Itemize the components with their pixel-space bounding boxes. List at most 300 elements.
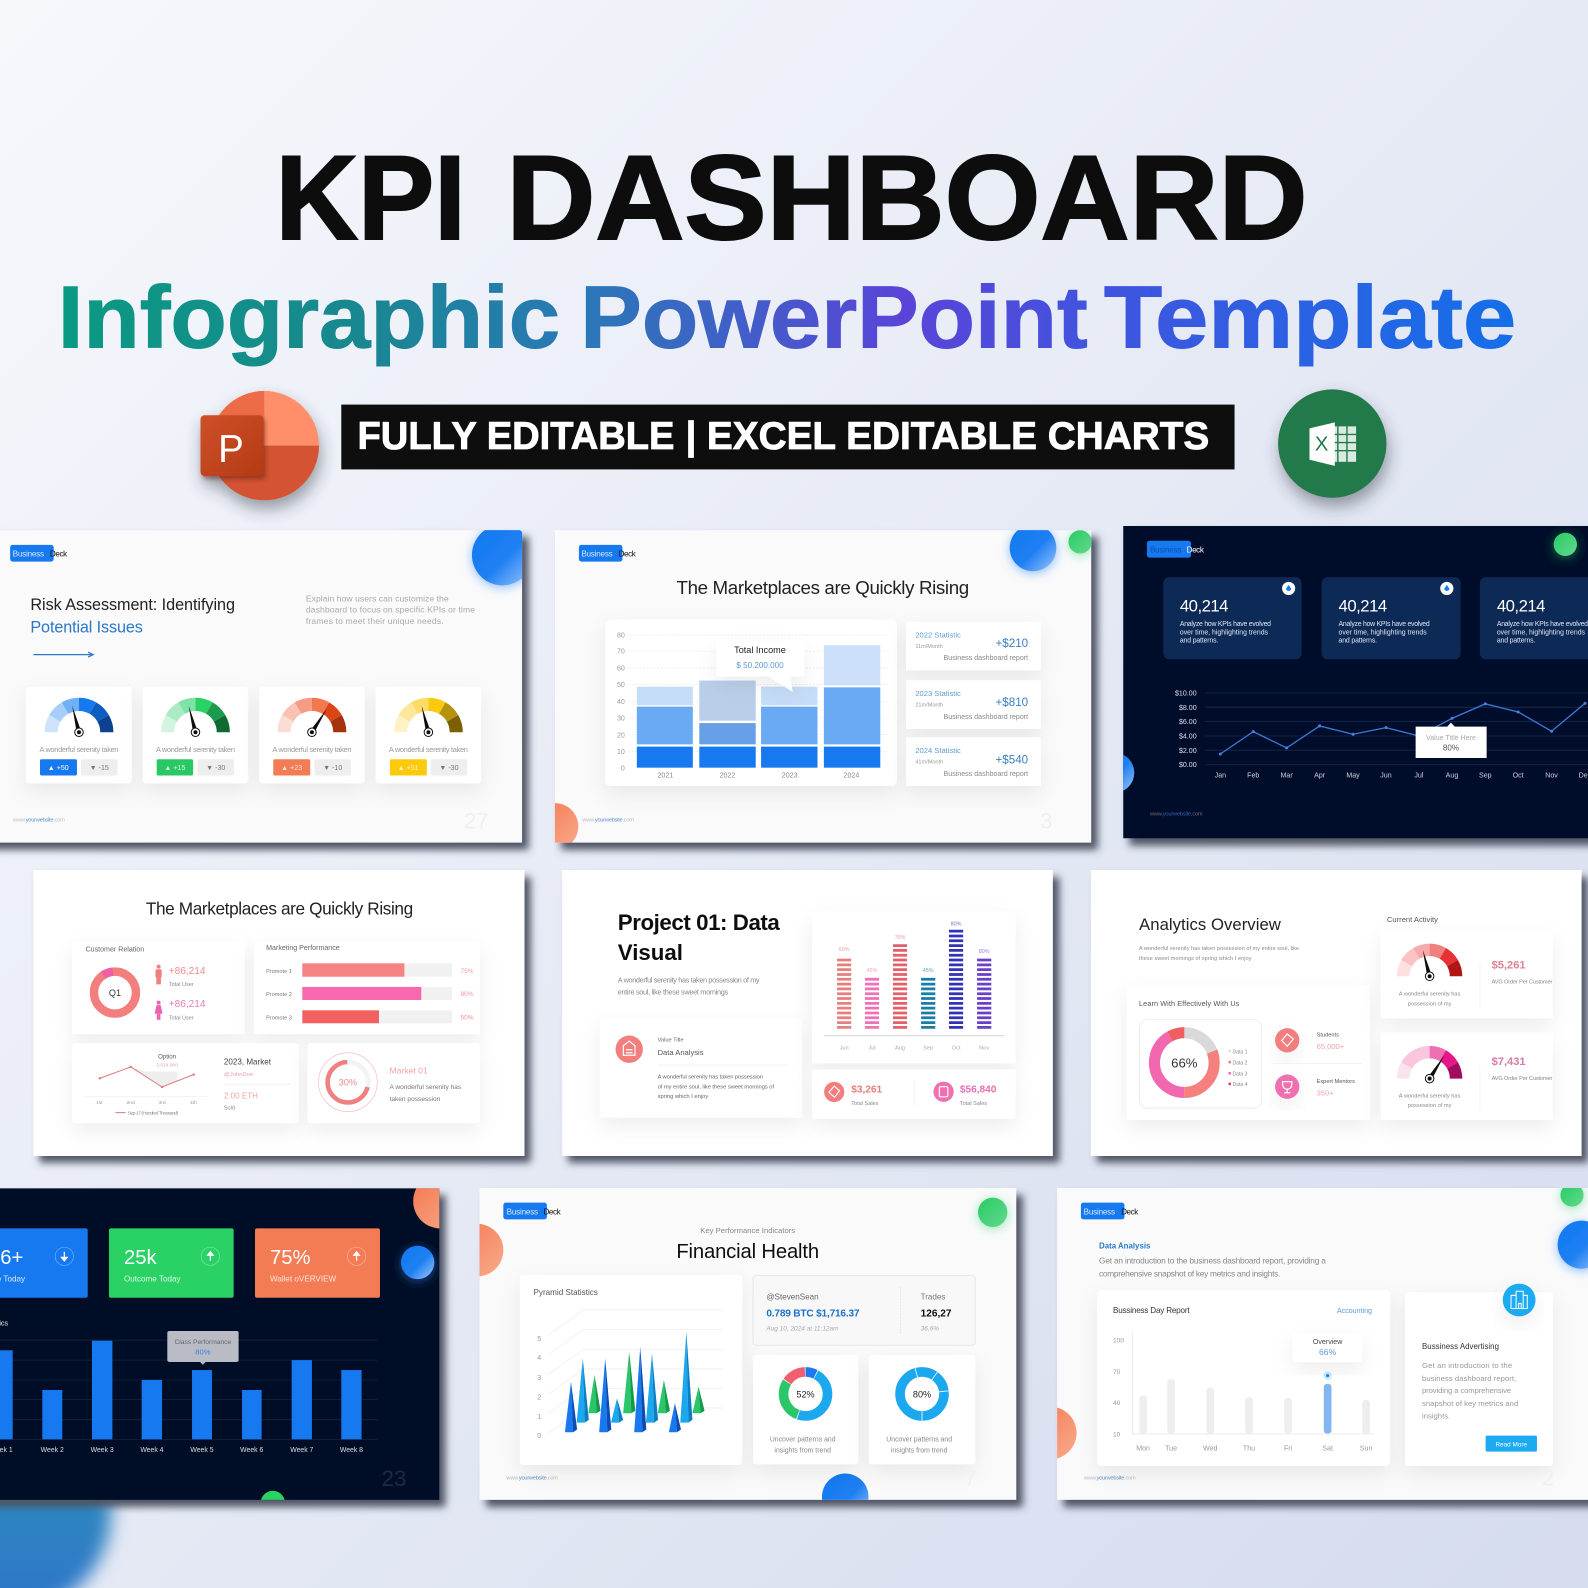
card: marketing performance: 75% (460, 968, 474, 975)
card: line chart (72, 1043, 299, 1123)
card: yellow gauge (376, 687, 481, 783)
card: outcome today: 25k (124, 1247, 157, 1269)
chart: line chart: Sep (1479, 771, 1492, 779)
footer url: www.yourwebsite.com (1083, 1476, 1136, 1482)
heading: Risk Assessment: Identifying (30, 596, 235, 614)
card: trade summary: @StevenSean (766, 1292, 819, 1301)
stat card 2024: 2024 Statistic (915, 746, 961, 755)
heading: Project 01: Data (618, 910, 780, 935)
chart: line chart: Jun (1380, 771, 1392, 779)
chart: striped bars: Oct (952, 1046, 961, 1052)
tooltip: value title: Value Title Here (1426, 734, 1476, 742)
card: business advertising: Get an introduction to the (1422, 1361, 1512, 1370)
card: pyramid statistics: 0 (537, 1432, 541, 1440)
card: data analysis (600, 1018, 802, 1118)
card: donut 52% (753, 1355, 858, 1464)
card: data analysis: A wonderful serenity has taken possession (658, 1074, 763, 1080)
card: line chart: Sep-17 (Hundred Thousand) (128, 1111, 179, 1117)
description: comprehensive snapshot of key metrics and insights. (1099, 1268, 1280, 1278)
card: gauge red (1381, 932, 1553, 1018)
chart: weekly bars: Week 4 (140, 1447, 164, 1454)
chart: stacked bars: 2022 (720, 771, 735, 779)
icon: Excel logo: X (1315, 434, 1329, 456)
card: market ring: A wonderful serenity has (390, 1084, 462, 1091)
card: business day report: 100 (1113, 1337, 1124, 1344)
card: donut 80%: 80% (913, 1390, 931, 1400)
card: green gauge: ▼ -30 (206, 764, 225, 772)
stat card 2022 (906, 622, 1041, 670)
stat card 2023: 2023 Statistic (915, 689, 961, 698)
chart: weekly bars (0, 1340, 377, 1454)
KPI card 2: Analyze how KPIs have evolved (1339, 621, 1430, 628)
logo: Deck (619, 550, 637, 559)
KPI card 1 (1163, 577, 1302, 659)
subtitle: Infographic PowerPoint Template: Template (1104, 267, 1516, 366)
chart: striped bars: Aug (895, 1046, 905, 1052)
heading (30, 596, 235, 637)
logo (1147, 541, 1205, 558)
card: business day report: Tue (1165, 1445, 1177, 1453)
card: gauge red: possession of my (1408, 1001, 1452, 1007)
chart: stacked bars: 2021 (658, 771, 673, 779)
tooltip: class performance: Class Performance (174, 1339, 232, 1346)
KPI card 1: over time, highlighting trends (1180, 629, 1269, 636)
chart: striped bars: 80% (979, 949, 990, 955)
card: data analysis: Value Title (658, 1038, 684, 1044)
footer url: www.yourwebsite.com (581, 817, 634, 823)
chart: line chart: $0.00 (1179, 761, 1197, 769)
card: blue gauge (26, 687, 132, 783)
icon: PowerPoint logo: P (218, 428, 244, 471)
card: yellow gauge: ▼ -30 (439, 764, 459, 772)
card: donut 52%: insights from trend (774, 1447, 831, 1454)
stat card 2023: Business dashboard report (944, 713, 1028, 721)
logo: Business (581, 550, 613, 559)
card: total sales: $3,261 (851, 1084, 883, 1095)
chart: striped bars: 60% (839, 947, 850, 953)
panel: slide 7 dark weekly bars (0, 1174, 468, 1515)
chart: stacked bars: 60 (617, 664, 625, 672)
card: donut 52%: 52% (796, 1390, 815, 1400)
card: data analysis: spring which I enjoy (658, 1094, 708, 1100)
subtitle: Infographic PowerPoint Template: PowerPoint (580, 267, 1088, 366)
card: trade summary: Trades (921, 1292, 945, 1301)
card: gauge red: A wonderful serenity has (1399, 991, 1461, 997)
card: green gauge: A wonderful serenity taken (156, 745, 235, 754)
KPI card 2: and patterns. (1339, 638, 1377, 645)
chart: weekly bars: Week 6 (240, 1447, 264, 1454)
card: marketing performance: Promote 3 (266, 1016, 292, 1022)
logo (503, 1203, 562, 1219)
card: business day report: 40 (1113, 1400, 1121, 1407)
card: pyramid statistics: 4 (537, 1354, 541, 1362)
card: learn effectively: Data 2 (1233, 1060, 1248, 1066)
card: trade summary (753, 1276, 975, 1345)
card: trade summary: 126,27 (921, 1309, 952, 1320)
KPI card 3: 40,214 (1497, 597, 1545, 616)
description: A wonderful serenity has taken possession of my (618, 976, 760, 985)
chart: striped bars (812, 911, 1015, 1063)
footer url: www.yourwebsite.com (1149, 811, 1203, 817)
description: Explain how users can customize the (306, 594, 449, 604)
icon: Excel logo (1278, 389, 1386, 498)
card: learn effectively: Data 4 (1233, 1082, 1248, 1088)
stat card 2023 (906, 680, 1041, 729)
card: outcome today (109, 1228, 234, 1298)
card: gauge pink: $7,431 (1492, 1056, 1526, 1068)
chart: stacked bars: 50 (617, 681, 625, 689)
chart: line chart: Aug (1446, 771, 1458, 779)
card: pyramid statistics: 3 (537, 1374, 541, 1382)
stat card 2023: +$810 (995, 696, 1029, 709)
card: line chart: Option (158, 1054, 176, 1060)
card: donut 80%: insights from trend (891, 1447, 948, 1454)
panel: slide 2 marketplaces stacked bars (532, 525, 1098, 850)
banner: fully editable: | (686, 415, 696, 458)
chart: stacked bars: 0 (621, 765, 625, 773)
chart: line chart: Apr (1314, 771, 1326, 779)
card: learn effectively: Learn With Effectively With Us (1139, 999, 1240, 1008)
card: customer relation: Q1 (109, 988, 121, 998)
card: donut 80%: Uncover patterns and (886, 1437, 952, 1444)
card: business advertising: Read More (1495, 1442, 1527, 1449)
card: business advertising: snapshot of key metrics and (1422, 1399, 1518, 1408)
card: wallet overview (255, 1228, 380, 1298)
chart: stacked bars: 30 (617, 715, 625, 723)
subtitle: Infographic PowerPoint Template: Infographic (58, 267, 560, 366)
page number: 27 (464, 808, 489, 833)
chart: middle row light blue pyramids (577, 1332, 692, 1423)
card: marketing performance: Promote 1 (266, 969, 292, 975)
card: gauge red: AVG Order Per Customer (1492, 979, 1552, 985)
heading: Data Analysis (1099, 1241, 1151, 1250)
card: business day report: Thu (1243, 1445, 1255, 1453)
card: customer relation (72, 942, 245, 1034)
chart: line chart: $2.00 (1179, 747, 1197, 755)
KPI card 1: Analyze how KPIs have evolved (1180, 621, 1271, 628)
chart: line chart: Mar (1281, 771, 1293, 779)
footer url: www.yourwebsite.com (505, 1476, 558, 1482)
card: donut 52%: Uncover patterns and (770, 1437, 836, 1444)
chart: striped bars: 45% (923, 968, 934, 974)
card: market ring: taken possession (390, 1096, 441, 1103)
arrow (33, 652, 93, 657)
tooltip: value title (1416, 723, 1487, 758)
page number: 3 (1040, 808, 1052, 833)
card: income today (0, 1228, 88, 1298)
chart: stacked bars: 80 (617, 632, 625, 640)
card: wallet overview: 75% (270, 1247, 311, 1269)
card: yellow gauge: ▲ +51 (398, 764, 419, 772)
card: marketing performance: Marketing Performance (266, 944, 340, 952)
chart: weekly bars: Week 8 (340, 1447, 363, 1454)
panel: slide 3 dark line chart (1094, 526, 1588, 846)
chart: stacked bars: 40 (617, 698, 625, 706)
description: dashboard to focus on specific KPIs or time (306, 605, 475, 615)
card: blue gauge: A wonderful serenity taken (39, 745, 118, 754)
chart: line chart: $10.00 (1175, 690, 1197, 698)
chart: weekly bars: Week 3 (91, 1447, 114, 1454)
description (1099, 1256, 1326, 1278)
card: business day report: 66% (1319, 1347, 1337, 1357)
KPI card 3: over time, highlighting trends (1497, 629, 1586, 636)
card: customer relation: +86,214 (169, 966, 206, 977)
chart: line chart: $6.00 (1179, 718, 1197, 726)
description: A wonderful serenity has taken possession of my entire soul, like (1139, 946, 1299, 952)
card: business day report: Overview (1313, 1338, 1343, 1346)
card: donut 80% (869, 1355, 975, 1464)
heading: The Marketplaces are Quickly Rising (677, 577, 969, 598)
card: line chart: 3,514.000 (156, 1062, 178, 1068)
card: line chart: 2.00 ETH (224, 1092, 258, 1101)
chart: line chart: Feb (1247, 771, 1259, 779)
card: pyramid statistics: 1 (537, 1413, 541, 1421)
page number: 7 (964, 1466, 977, 1491)
card: wallet overview: Wallet oVERVIEW (270, 1275, 336, 1284)
card: learn effectively: Students (1317, 1033, 1339, 1039)
description (618, 976, 760, 996)
title: KPI DASHBOARD: DASHBOARD (506, 132, 1307, 265)
chart: striped bars: Sep (923, 1046, 933, 1052)
banner: fully editable: FULLY EDITABLE (358, 415, 674, 458)
panel: slide 6 analytics overview (1091, 870, 1588, 1163)
card: marketing performance: 80% (460, 991, 474, 998)
heading: Analytics Overview (1139, 915, 1282, 934)
chart: striped bars: 75% (895, 935, 906, 941)
chart: weekly bars: Week 2 (41, 1447, 64, 1454)
card: trade summary: 36,6% (921, 1325, 939, 1332)
card: pyramid statistics (520, 1275, 742, 1465)
card: customer relation: +86,214 (169, 999, 206, 1010)
card: business advertising: business dashboard report, (1422, 1374, 1516, 1383)
heading: Financial Health (676, 1241, 819, 1263)
logo: Business (13, 550, 44, 559)
stat card 2024: +$540 (995, 754, 1029, 767)
description: entire soul, like these sweet mornings (618, 987, 729, 996)
subtitle: Infographic PowerPoint Template (58, 267, 1516, 366)
tooltip: value title: 80% (1443, 743, 1459, 752)
KPI card 3: and patterns. (1497, 638, 1535, 645)
stat card 2022: 2022 Statistic (915, 631, 961, 640)
logo: Deck (1121, 1207, 1139, 1216)
card: line chart: 2nd (127, 1100, 135, 1106)
card: data analysis: Data Analysis (658, 1048, 704, 1057)
logo (10, 545, 68, 562)
card: trade summary: Aug 10, 2024 at 11:12am (765, 1325, 839, 1332)
chart: line chart: $4.00 (1179, 733, 1197, 741)
card: line chart: 3rd (159, 1100, 166, 1106)
card: customer relation: Total User (169, 1015, 194, 1021)
card: pyramid statistics: 5 (537, 1335, 541, 1343)
card: red gauge (259, 687, 365, 783)
card: business day report: Sun (1360, 1445, 1372, 1453)
KPI card 2: over time, highlighting trends (1339, 629, 1427, 636)
label: current activity: Current Activity (1387, 915, 1438, 924)
card: line chart: 2023, Market (224, 1057, 272, 1066)
card: total sales: Total Sales (960, 1101, 987, 1107)
chart: line chart: Nov (1545, 771, 1558, 779)
description: frames to meet their unique needs. (306, 616, 444, 626)
tooltip: class performance: 80% (195, 1347, 211, 1356)
stat card 2023: 21m/Month (915, 703, 943, 709)
chart: striped bars: Jul (868, 1046, 876, 1052)
chart: line chart: $8.00 (1179, 704, 1197, 712)
card: total sales: Total Sales (851, 1101, 879, 1107)
KPI card 2: 40,214 (1339, 597, 1387, 616)
logo: Business (1150, 546, 1181, 555)
card: business day report: Sat (1322, 1445, 1333, 1453)
card: business day report: 70 (1113, 1369, 1121, 1376)
tooltip: total income (716, 641, 804, 692)
stat card 2024: Business dashboard report (944, 770, 1028, 778)
card: business day report: Accounting (1337, 1307, 1372, 1315)
logo: Deck (543, 1207, 562, 1216)
panel: slide 5 project data visual (562, 870, 1059, 1163)
card: business advertising: providing a comprehensive (1422, 1386, 1511, 1395)
card: market ring (308, 1043, 480, 1123)
heading: Visual (618, 940, 683, 965)
card: green gauge: ▲ +15 (164, 764, 185, 772)
title: KPI DASHBOARD: KPI (275, 132, 466, 265)
banner: fully editable (341, 405, 1235, 469)
card: gauge pink (1381, 1033, 1553, 1120)
stat card 2024 (906, 737, 1041, 786)
card: trade summary: 0.789 BTC $1,716.37 (766, 1309, 860, 1320)
card: blue gauge: ▼ -15 (90, 764, 109, 772)
card: line chart: 4th (190, 1100, 197, 1106)
card: learn effectively: 65,000+ (1317, 1042, 1345, 1051)
panel: slide 4 marketplaces pink (33, 870, 531, 1163)
card: business day report: Fri (1284, 1445, 1293, 1453)
chart: line chart: Jul (1414, 771, 1424, 779)
card: learn effectively (1127, 985, 1370, 1120)
card: line chart: @JohnDoe (224, 1072, 253, 1078)
card: gauge pink: possession of my (1408, 1103, 1452, 1109)
card: total sales: $56,840 (960, 1084, 997, 1095)
chart: stacked bars: 2023 (782, 771, 798, 779)
page number: 23 (382, 1466, 406, 1491)
tooltip: total income: Total Income (734, 645, 786, 655)
card: pyramid statistics: 2 (537, 1393, 541, 1401)
card: customer relation: Customer Relation (86, 945, 144, 953)
card: gauge pink: A wonderful serenity has (1399, 1093, 1461, 1099)
stat card 2022: +$210 (995, 637, 1029, 650)
chart: striped bars: Jun (840, 1046, 849, 1052)
logo: Deck (1187, 546, 1205, 555)
stat card 2022: 11m/Month (915, 644, 943, 650)
card: customer relation: Total User (169, 982, 194, 988)
chart: line chart: May (1346, 771, 1360, 779)
panel: slide 9 business day report (1024, 1184, 1588, 1507)
chart: line chart (1175, 690, 1588, 779)
card: business advertising (1405, 1284, 1553, 1466)
chart: striped bars: 45% (867, 968, 878, 974)
card: line chart: 1st (96, 1100, 103, 1106)
tooltip: class performance (167, 1331, 239, 1365)
KPI card 2 (1322, 577, 1461, 659)
card: red gauge: ▲ +23 (281, 764, 302, 772)
description: these sweet mornings of spring which I enjoy (1139, 956, 1252, 962)
panel: slide 8 financial health (451, 1188, 1023, 1520)
chart: line chart: Jan (1215, 771, 1226, 779)
description (306, 594, 475, 626)
logo: Business (1084, 1207, 1115, 1216)
logo (579, 545, 637, 562)
card: learn effectively: 66% (1171, 1055, 1198, 1070)
card: outcome today: Outcome Today (124, 1275, 181, 1284)
chart: weekly bars: Week 5 (190, 1447, 214, 1454)
card: learn effectively: Data 1 (1233, 1049, 1248, 1055)
page number: 2 (1542, 1466, 1554, 1491)
logo (1081, 1203, 1139, 1219)
chart: front row blue pyramids (565, 1347, 681, 1432)
card: red gauge: A wonderful serenity taken (272, 745, 351, 754)
chart: weekly bars: Week 7 (290, 1447, 314, 1454)
card: market ring: 30% (339, 1078, 357, 1088)
card: total sales (812, 1069, 1015, 1119)
icon: PowerPoint logo (201, 391, 319, 500)
description (1139, 946, 1299, 962)
card: business advertising: Bussiness Advertising (1422, 1342, 1499, 1351)
KPI card 1: and patterns. (1180, 638, 1218, 645)
card: marketing performance: Promote 2 (266, 992, 292, 998)
chart: back row green pyramids (588, 1352, 705, 1413)
card: marketing performance (254, 942, 480, 1034)
chart: stacked bars: 2024 (844, 771, 859, 779)
description: Get an introduction to the business dashboard report, providing a (1099, 1256, 1326, 1266)
card: business advertising: insights. (1422, 1412, 1450, 1421)
card: blue gauge: ▲ +50 (48, 764, 69, 772)
chart: line chart: Oct (1513, 771, 1524, 779)
card: green gauge (143, 687, 248, 783)
card: business day report: Bussiness Day Report (1113, 1306, 1190, 1315)
card: learn effectively: Expert Mentors (1317, 1079, 1355, 1085)
heading: Potential Issues (30, 619, 143, 637)
KPI card 1: 40,214 (1180, 597, 1228, 616)
card: line chart: Sold (224, 1105, 235, 1111)
card: learn effectively: 350+ (1317, 1089, 1334, 1098)
card: market ring: Market 01 (390, 1066, 428, 1076)
card: business day report: Wed (1203, 1445, 1218, 1453)
heading: The Marketplaces are Quickly Rising (146, 898, 413, 918)
KPI card 3 (1480, 577, 1588, 659)
stat card 2024: 41m/Month (915, 760, 943, 766)
chart: stacked bars: 70 (617, 648, 625, 656)
decorative blurred teal blob (0, 1408, 111, 1588)
card: business day report: 10 (1113, 1432, 1121, 1439)
logo: Business (507, 1207, 538, 1216)
chart: stacked bars (605, 620, 897, 786)
card: income today: 6+ (0, 1247, 23, 1269)
card: gauge red: $5,261 (1492, 959, 1526, 971)
card: gauge pink: AVG Order Per Customer (1492, 1076, 1552, 1082)
card: business day report: Mon (1136, 1445, 1150, 1453)
stat card 2022: Business dashboard report (944, 654, 1028, 662)
card: marketing performance: 50% (460, 1015, 474, 1022)
card: data analysis: of my entire soul, like these sweet mornings of (658, 1084, 774, 1090)
panel: slide 1 risk assessment gauges (0, 525, 533, 850)
chart: striped bars: Nov (979, 1046, 989, 1052)
chart: stacked bars: 20 (617, 731, 625, 739)
card: pyramid statistics: Pyramid Statistics (534, 1288, 598, 1297)
KPI card 3: Analyze how KPIs have evolved (1497, 621, 1588, 628)
card: red gauge: ▼ -10 (323, 764, 342, 772)
heading (676, 1226, 819, 1263)
footer url: www.yourwebsite.com (12, 817, 65, 823)
logo: Deck (50, 550, 68, 559)
card: learn effectively: Data 3 (1233, 1072, 1248, 1078)
tooltip: total income: $ 50.200.000 (736, 661, 784, 670)
